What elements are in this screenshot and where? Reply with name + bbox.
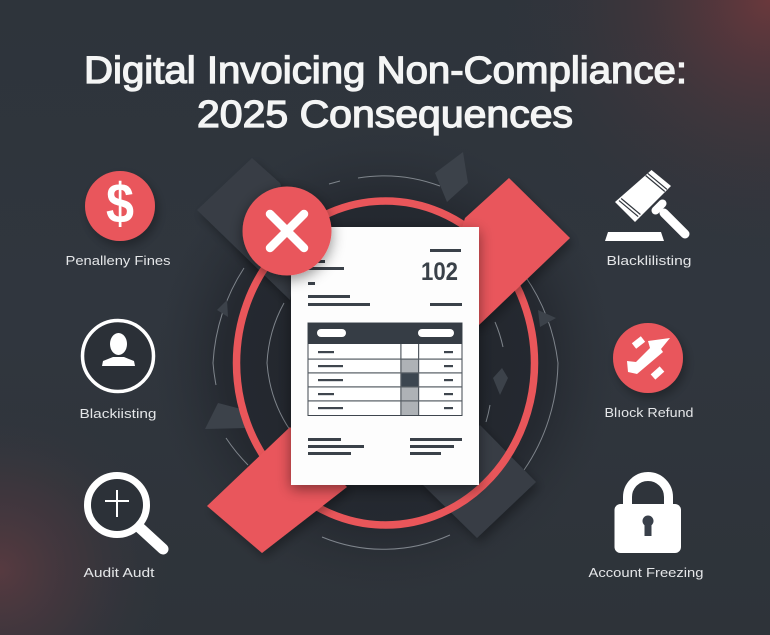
audit item (84, 476, 163, 580)
invoice footer lines (308, 438, 462, 455)
label: Blıock Refund (604, 405, 694, 420)
icon: gavel (605, 170, 685, 241)
blacklisting item right (605, 170, 692, 268)
red band top-right (440, 178, 570, 325)
central graphic: background shapes and rings (197, 152, 570, 553)
label: Penalleny Fines (66, 253, 171, 268)
title: Digital Invoicing Non-Compliance: (84, 50, 687, 92)
label: Blacklilisting (606, 253, 692, 268)
icon: person (82, 320, 154, 392)
title (84, 50, 687, 136)
invoice document (291, 227, 479, 485)
icon: dollar: $ (106, 172, 134, 236)
label: Blackiisting (80, 406, 156, 421)
icon: magnifier (88, 476, 163, 549)
dark band bottom-right (423, 425, 536, 538)
icon: padlock (614, 476, 681, 553)
invoice header lines (308, 249, 462, 306)
dark band top-left (197, 158, 300, 300)
block refund item (604, 323, 694, 420)
title: 2025 Consequences (197, 94, 573, 136)
thin orbit arcs (213, 176, 558, 549)
invoice table (308, 323, 462, 416)
red band bottom-left (207, 427, 347, 553)
label: Account Freezing (588, 565, 704, 580)
invoice number: 102 (421, 258, 458, 286)
account freezing item (588, 476, 704, 580)
red ring (236, 201, 534, 525)
label: Audit Audt (84, 565, 155, 580)
icon: red X badge (242, 186, 332, 276)
icon: refund arrow (613, 323, 683, 393)
small dark polygons (205, 152, 556, 429)
penalty fines item (66, 171, 171, 268)
blacklisting item left (80, 320, 156, 421)
